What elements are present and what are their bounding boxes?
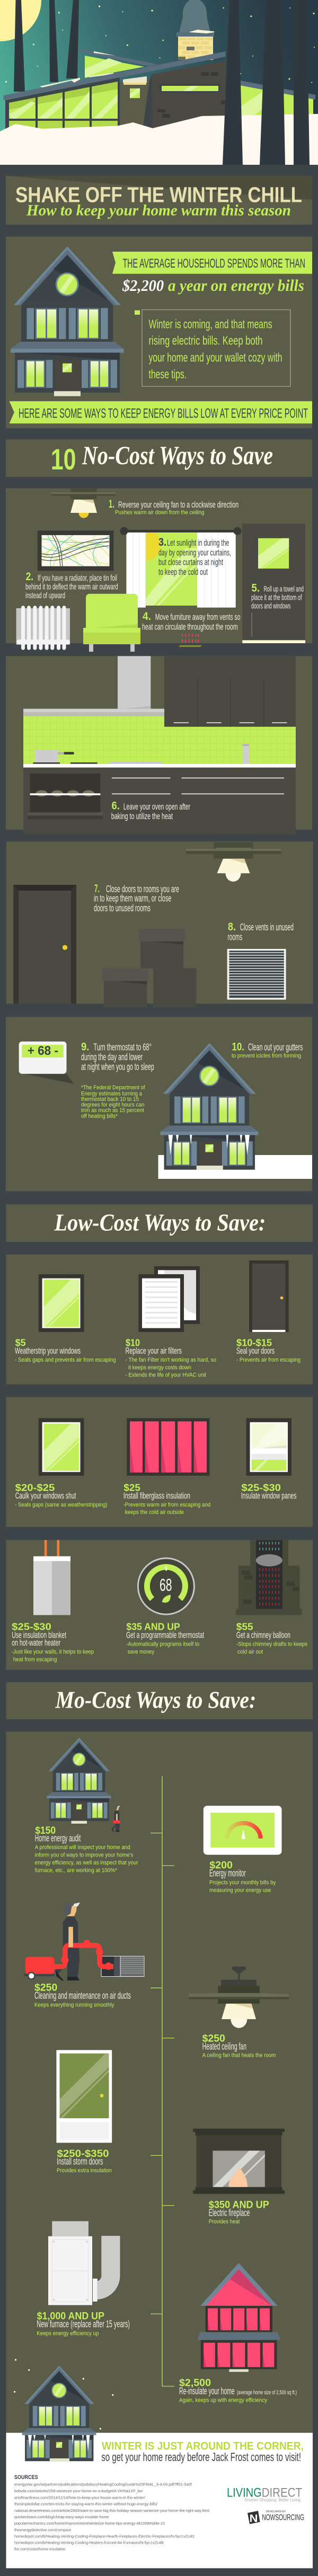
counter and base cabinets [23,764,296,834]
tip 3 [158,536,231,577]
footnote: federal department of energy: thermostat back 10 to 15 [81,1096,139,1103]
tip 9: 9. [81,1041,89,1053]
icon: air filters [138,1266,200,1332]
icon: new furnace [48,2221,120,2305]
callout: winter is coming: these tips. [148,367,187,381]
tip 4: 4. [143,610,151,623]
item: window panes: $25-$30 [241,1482,281,1493]
icon: framed abstract art [38,530,113,571]
tip 7: doors to unused rooms [94,903,151,913]
tip 1 [109,498,238,516]
item: caulk [15,1482,107,1508]
item: weatherstrip: Weatherstrip your windows [15,1346,81,1356]
chimney [176,30,214,60]
panel: 10 no-cost heading [6,439,312,477]
sources: energystar.gov/ia/partners/publications/pubdocs/HeatingCoolingGuide%20FINAL_9-4-09.pdf?ff01-5a0f [14,2482,192,2487]
item: storm doors: $250-$350 [57,2148,109,2160]
item: home energy audit: $150 [35,1825,56,1836]
footnote: federal department of energy: off heating bills* [81,1113,118,1120]
item: air ducts: Keeps everything running smoothly [34,2002,114,2008]
logo: NowSourcing: N [249,2513,258,2525]
item: insulation blanket: -Just like your walls, it helps to keep [12,1649,94,1655]
logo: NowSourcing: DEVELOPED BY [266,2510,286,2512]
icon: insulated window pane [246,1418,292,1476]
item: seal doors: - Prevents air from escaping [236,1357,301,1363]
item: home energy audit: inform you of ways to improve your home's [35,1852,134,1858]
icon: storm door [56,2050,112,2143]
panel: mo-cost timeline [6,1731,313,2433]
tip 4: heat can circulate throughout the room [142,621,237,632]
panel: kitchen tip 6 [6,656,312,834]
icon: duct cleaning technician with vacuum [24,1903,144,1981]
ribbon: ways to keep bills low [10,401,312,423]
item: fiberglass: $25 [123,1482,140,1493]
sources: SOURCES [14,2474,38,2481]
footnote: federal department of energy [81,1085,145,1120]
tip 1: Reverse your ceiling fan to a clockwise direction [118,500,238,510]
icon: water heater with blanket [33,1540,70,1615]
panel: 10 no-cost heading: 10 [51,442,76,476]
item: energy monitor [209,1860,276,1894]
closing message: WINTER IS JUST AROUND THE CORNER, [102,2440,304,2452]
icon: wall thermostat [19,1042,74,1084]
icon: house for energy audit [47,1738,111,1824]
item: seal doors [236,1338,301,1363]
item: heated ceiling fan: Heated ceiling fan [202,2041,246,2051]
item: new furnace [37,2311,130,2337]
item: chimney balloon: cold air out [237,1649,263,1655]
icon: caulked window [39,1418,84,1476]
item: weatherstrip: $5 [15,1338,26,1348]
item: insulation blanket: Use insulation blanket [12,1630,66,1640]
icon: closing house with icicles [22,2366,96,2462]
panel: low-cost heading [6,1204,313,1242]
icon: fiberglass insulation [127,1418,209,1476]
tip 1: 1. [109,498,114,510]
tip 8: rooms [227,931,242,942]
item: fiberglass: -Prevents warm air from escaping and [123,1502,210,1508]
timeline axis [151,1776,174,2386]
item: electric fireplace: $350 AND UP [209,2199,269,2210]
icon: faucet [242,743,249,764]
item: programmable thermostat: Get a programmable thermostat [126,1630,204,1640]
item: energy monitor: measuring your energy use [209,1887,271,1894]
icon: range hood [23,656,164,716]
item: energy monitor: Energy monitor [209,1868,246,1879]
panel: low-cost row 1 [6,1255,313,1384]
item: chimney balloon: $55 [236,1622,253,1632]
sources: theenergydetective.com/compare [14,2527,71,2532]
item: programmable thermostat: -Automatically programs itself to [126,1641,199,1648]
footnote: federal department of energy: *The Federal Department of [81,1085,145,1091]
tip 7 [94,883,179,913]
panel: low-cost heading: Low-Cost Ways to Save: [54,1209,266,1236]
item: seal doors: $10-$15 [236,1338,272,1348]
left trees [14,0,79,92]
logo: Living Direct: DIRECT [262,2486,302,2500]
ribbon: average household [112,252,312,274]
tip 6: Leave your oven open after [123,802,190,812]
icon: programmable thermostat [138,1558,194,1614]
sources: thesimpledollar.com/ten-tricks-for-staying-warm-this-winter-without-huge-energy-bills/ [14,2502,158,2507]
tip 1: Pushes warm air down from the ceiling [115,510,204,516]
icon: electric fireplace [193,2129,285,2194]
item: air filters: $10 [126,1338,140,1348]
item: insulation blanket: on hot-water heater [12,1638,60,1648]
item: seal doors: Seal your doors [236,1346,275,1356]
item: new furnace: Keeps energy efficiency up [37,2330,99,2337]
item: weatherstrip [15,1338,116,1363]
sources: homedepot.com/b/Heating-Venting-Cooling-Fireplace-Hearth-Fireplaces-Electric-Fireplaces/N-5yc1vZc4l1 [14,2534,195,2538]
callout: winter is coming: rising electric bills. Keep both [148,334,263,348]
tip 6 [111,800,190,821]
item: air ducts: $250 [34,1982,57,1993]
item: energy monitor: Projects your monthly bills by [209,1880,276,1886]
sources: homedepot.com/b/Heating-Venting-Cooling-Heaters-Forced-Air-Furnaces/N-5yc1vZc4lk [14,2541,164,2545]
panel: title [6,176,312,225]
item: air filters: - Extends the life of your HVAC unit [125,1372,206,1379]
footnote: federal department of energy: Energy estimates turning a [81,1090,143,1097]
tip 6: baking to utilize the heat [111,811,173,821]
tip 10: 10. [232,1041,244,1053]
item: heated ceiling fan: $250 [202,2033,225,2044]
item: home energy audit: A professional will inspect your home and [35,1844,130,1851]
item: fiberglass: keeps the cold air outside [125,1509,184,1516]
stat: energy bills: $2,200 [122,276,164,295]
sources [14,2474,209,2552]
item: chimney balloon [236,1622,307,1655]
icon: small technician [112,1806,120,1832]
icon: energy monitor [204,1806,282,1855]
item: electric fireplace: Electric fireplace [209,2207,250,2218]
front door with lamp [120,74,153,128]
tip 2 [25,571,118,600]
item: caulk: $20-$25 [15,1482,55,1493]
sources: fixr.com/costs/home-insulation [14,2547,66,2552]
tip 5: doors and windows [251,601,290,610]
icon: green armchair [83,594,140,652]
tip 4 [142,610,241,632]
tip 3: Let sunlight in during the [167,538,229,548]
upper cabinets [164,656,296,727]
item: electric fireplace: Provides heat [209,2219,240,2225]
icon: door with window [242,523,305,643]
item: re-insulate: Again, keeps up with energy efficiency [179,2397,267,2403]
tip 9 [81,1041,154,1072]
tip 2: behind it to deflect the warm air outward [25,583,118,592]
tip 3: 3. [158,536,166,548]
item: storm doors: Provides extra insulation [57,2168,112,2174]
main roof [3,51,226,100]
item: air filters: Replace your air filters [125,1346,182,1356]
icon: programmable thermostat: 68 [160,1576,172,1595]
item: insulation blanket: heat from escaping [13,1656,57,1663]
item: fiberglass: Install fiberglass insulation [123,1490,190,1500]
right wing window and roof [237,80,315,119]
icon: pot and burners [33,750,162,764]
icon: house with icicles in snow [158,1043,312,1179]
item: window panes [241,1482,297,1500]
tile backsplash [23,716,296,764]
tip 3: to keep the cold out [158,567,208,577]
item: programmable thermostat [126,1622,204,1655]
item: programmable thermostat: save money [128,1649,155,1655]
item: caulk: Caulk your windows shut [15,1490,76,1500]
logo: NowSourcing [248,2510,304,2525]
item: insulation blanket [12,1622,94,1663]
item: new furnace: $1,000 AND UP [37,2311,104,2322]
sources: national.deseretnews.com/article/2865/want-to-save-big-this-holiday-season-winterize-your-home-the-right-way.html [14,2508,209,2513]
icon: wall thermostat: + 68 - [28,1044,58,1058]
icon: floor vent with heat [179,634,202,647]
stat: energy bills: a year on energy bills [168,276,304,295]
right trees [223,0,310,165]
moon [0,0,41,41]
footnote: federal department of energy: degrees for eight hours can [81,1102,144,1108]
panel: doors and vents tips 7-8 [6,841,313,1003]
icon: chimney balloon [236,1540,302,1615]
sources: bobvila.com/articles/258-winterize-your-home-on-a-budget/#.VHXta1XF_bw [14,2489,143,2493]
tip 9: Turn thermostat to 68° [93,1042,152,1053]
tip 8 [227,921,294,942]
item: air filters [125,1338,216,1379]
icon: ceiling fan and lamp [186,842,281,882]
tip 7: Close doors to rooms you are [106,884,179,894]
item: insulation blanket: $25-$30 [12,1622,51,1632]
chimney smoke [180,0,210,32]
item: home energy audit [35,1825,138,1873]
floor band decoration and low elements: radiator [16,606,70,650]
item: re-insulate: Re-insulate your home [179,2386,235,2396]
tip 2: instead of upward [25,591,65,600]
icon: sealed door [249,1260,289,1332]
tip 5 [251,582,304,610]
tip 2: If you have a radiator, place tin foil [38,574,117,583]
item: chimney balloon: -Stops chimney drafts to keeps [236,1641,307,1648]
icon: ceiling fan and lamp [51,488,116,518]
tip 2: 2. [26,571,33,583]
tip 9: during the day and lower [81,1052,143,1062]
hero illustration: snowy house at night [0,0,318,165]
item: air filters: it keeps energy costs down [128,1364,191,1371]
tip 3: day by opening your curtains, [158,547,231,557]
logo: Living Direct: Smarter Shopping. Better Living. [244,2498,302,2502]
tip 3: but close curtains at night [158,557,223,567]
panel: low-cost row 2 [6,1397,313,1527]
sources: quickenloans.com/blog/cheap-easy-ways-insulate-home [14,2515,109,2519]
item: home energy audit: energy efficiency, as well as inspect that your [35,1860,138,1866]
tip 4: Move furniture away from vents so [155,612,241,622]
item: weatherstrip: - Seals gaps and prevents air from escaping [15,1357,116,1363]
panel: mo-cost heading [6,1682,313,1719]
panel: thermostat and gutters tips 9-10 [6,1017,312,1191]
item: heated ceiling fan: A ceiling fan that heats the room [202,2053,276,2059]
panel: 10 no-cost heading: No-Cost Ways to Save [82,440,273,470]
item: electric fireplace [209,2199,269,2225]
tip 10: to prevent icicles from forming [232,1053,301,1059]
dark brick wall with strip window [152,61,226,128]
icon: curtained window [120,527,242,608]
item: caulk: - Seals gaps (same as weatherstripping) [15,1502,107,1508]
tip 6: 6. [111,800,120,812]
logo: Living Direct: LIVING [227,2486,262,2500]
sources: artofmanliness.com/2014/11/14/how-to-keep-your-house-warm-in-the-winter/ [14,2495,146,2500]
footnote: federal department of energy: trim as much as 15 percent [81,1107,144,1114]
snow bank [0,114,318,165]
tip 8: 8. [228,921,236,933]
heading: subtitle: How to keep your home warm this season [26,202,291,219]
panel: mo-cost heading: Mo-Cost Ways to Save: [55,1686,256,1713]
item: air filters: - The fan Filter isn't working as hard, so [125,1357,216,1363]
tip 5: 5. [251,582,260,594]
tip 9: at night when you go to sleep [81,1061,154,1072]
sources: popularmechanics.com/home/improvement/winterize-home-tips-energy-461008#slide-10 [14,2521,165,2526]
item: heated ceiling fan [202,2033,276,2059]
stars [5,5,315,83]
item: fiberglass [123,1482,210,1516]
icon: weatherstripped window [39,1274,84,1332]
panel: intro [6,237,312,428]
tip 10 [232,1041,303,1059]
icon: house [11,246,123,396]
icon: heated ceiling fan [189,1967,289,2028]
item: re-insulate [179,2378,297,2403]
item: air ducts [34,1982,131,2008]
item: programmable thermostat: $35 AND UP [126,1622,180,1632]
item: home energy audit: Home energy audit [35,1833,81,1844]
upper clerestory window and roof [81,49,157,78]
panel: living room tips 1-5 [6,488,312,643]
callout: winter is coming [135,310,290,386]
icon: closed door [13,885,76,1003]
logo: Living Direct [227,2486,302,2502]
icon: insulated house cutaway [198,2263,280,2372]
panel: low-cost row 3 [6,1540,313,1670]
item: re-insulate: $2,500 [179,2378,211,2389]
item: home energy audit: furnace, etc., are working at 100%* [35,1867,118,1873]
item: storm doors: Install storm doors [57,2156,103,2167]
panel: footer [6,2359,313,2568]
tip 7: in to keep them warm, or close [94,893,171,904]
snow stars [14,2359,113,2430]
main window wall [5,77,120,132]
item: new furnace: New furnace (replace after 15 years) [37,2319,130,2330]
tip 7: 7. [94,883,100,895]
item: air ducts: Cleaning and maintenance on air ducts [34,1990,131,2001]
closing message [101,2440,304,2464]
icon: open oven with cookies [28,774,103,819]
item: energy monitor: $200 [209,1860,233,1871]
icon: stacked boxes [102,929,196,1008]
item: storm doors [57,2148,112,2174]
icon: wall vent [227,949,286,1000]
